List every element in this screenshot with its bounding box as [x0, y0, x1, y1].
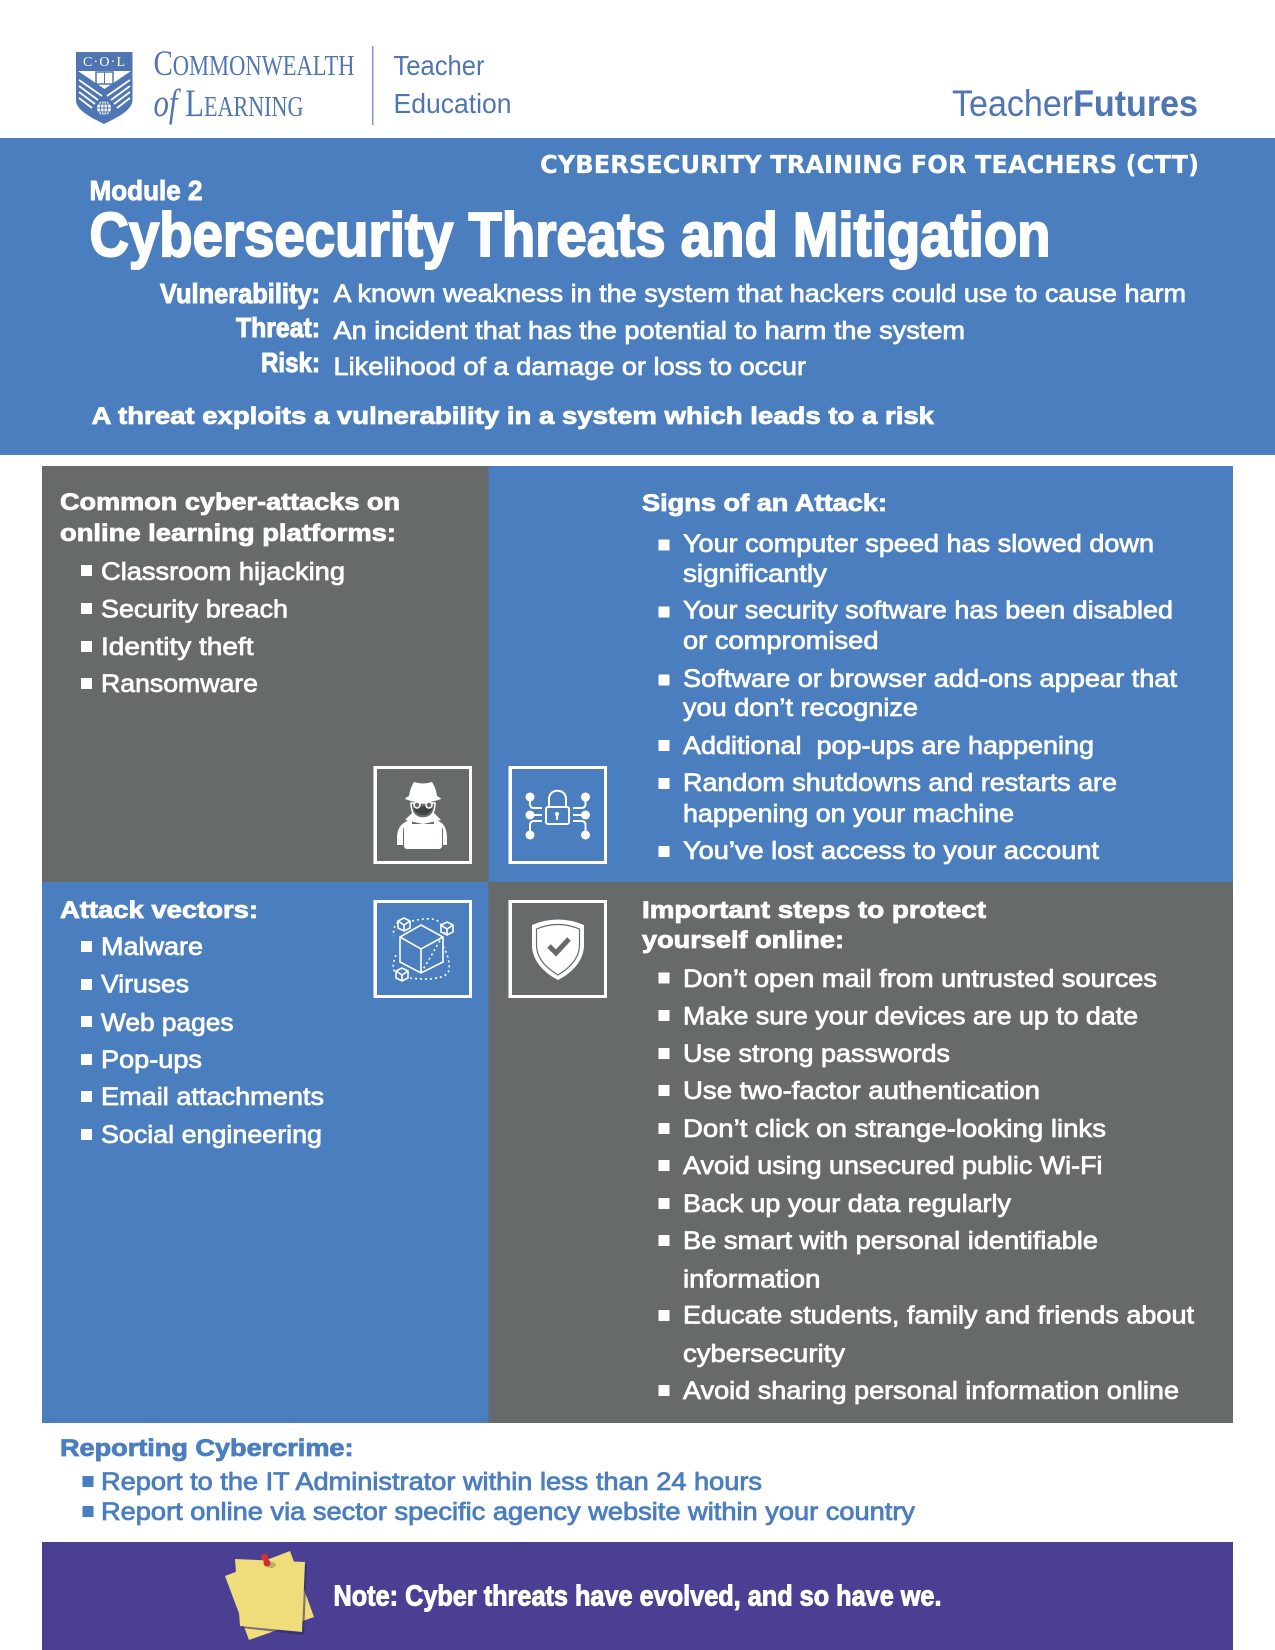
icon: COL shield	[76, 52, 132, 124]
list: Identity theft	[101, 633, 254, 661]
list: Don’t click on strange-looking links	[683, 1115, 1106, 1143]
definitions	[160, 278, 1186, 381]
list: Report to the IT Administrator within less than 24 hours	[101, 1468, 762, 1496]
list	[658, 530, 1177, 865]
icon: shield with check	[508, 900, 606, 998]
icon: sticky notes with pin	[225, 1551, 314, 1640]
icon: hacker	[373, 766, 470, 864]
definitions: A known weakness in the system that hackers could use to cause harm	[334, 280, 1186, 308]
definitions: Likelihood of a damage or loss to occur	[334, 353, 806, 381]
panel: note banner	[42, 1542, 1233, 1650]
list: Viruses	[101, 970, 189, 998]
list: or compromised	[683, 627, 878, 655]
list: Your security software has been disabled	[683, 596, 1173, 624]
heading: Signs of an Attack:	[642, 490, 887, 517]
definitions: Risk:	[261, 347, 320, 378]
programme title: CYBERSECURITY TRAINING FOR TEACHERS (CTT)	[540, 150, 1199, 179]
logo text: Teacher Education	[394, 50, 512, 119]
heading: Common cyber-attacks on	[60, 489, 400, 516]
logo text: Teacher Education: Teacher	[394, 50, 484, 81]
list: cybersecurity	[683, 1340, 846, 1368]
definitions: Vulnerability:	[160, 278, 320, 309]
panel: signs of an attack	[488, 466, 1233, 882]
note text: Note: Cyber threats have evolved, and so have we.	[334, 1580, 942, 1612]
logo text: Teacher Education: Education	[394, 88, 512, 119]
list: information	[683, 1266, 820, 1294]
heading: online learning platforms:	[60, 520, 396, 547]
list: Avoid using unsecured public Wi-Fi	[683, 1152, 1102, 1180]
list: Web pages	[101, 1009, 234, 1037]
list: Malware	[101, 933, 203, 961]
list: Educate students, family and friends about	[683, 1302, 1194, 1330]
panel: title banner	[0, 138, 1275, 455]
list: Make sure your devices are up to date	[683, 1002, 1138, 1030]
list: Use two-factor authentication	[683, 1077, 1040, 1105]
main title: Cybersecurity Threats and Mitigation	[90, 201, 1050, 270]
header: organisation logo	[76, 43, 512, 125]
list: you don’t recognize	[683, 694, 918, 722]
logo wordmark: Commonwealth of Learning: of LEARNING	[154, 82, 304, 125]
panel: common cyber-attacks	[42, 466, 488, 882]
list: Pop-ups	[101, 1046, 202, 1074]
definitions: Threat:	[236, 312, 320, 343]
list	[658, 965, 1194, 1405]
icon: orbiting cube	[373, 900, 470, 998]
icon: COL shield: C·O·L	[83, 55, 125, 70]
list: Social engineering	[101, 1121, 322, 1149]
logo wordmark: Commonwealth of Learning: COMMONWEALTH	[154, 43, 354, 83]
panel: attack vectors	[42, 882, 488, 1423]
list: significantly	[683, 560, 828, 588]
heading: yourself online:	[642, 927, 844, 954]
list: Don’t open mail from untrusted sources	[683, 965, 1157, 993]
list: Software or browser add-ons appear that	[683, 665, 1177, 693]
panel: protective steps	[488, 882, 1233, 1423]
heading: Reporting Cybercrime:	[60, 1435, 354, 1462]
heading: Important steps to protect	[642, 897, 986, 924]
list	[82, 1468, 916, 1526]
list: Be smart with personal identifiable	[683, 1227, 1098, 1255]
list	[81, 558, 345, 698]
icon: network lock	[508, 766, 606, 864]
logo: TeacherFutures: TeacherFutures	[952, 83, 1198, 124]
list: Ransomware	[101, 670, 258, 698]
list: Use strong passwords	[683, 1040, 950, 1068]
list: Additional pop-ups are happening	[683, 732, 1094, 760]
key statement: A threat exploits a vulnerability in a system which leads to a risk	[92, 403, 935, 430]
list: Your computer speed has slowed down	[683, 530, 1154, 558]
reporting cybercrime	[60, 1435, 916, 1526]
list: Security breach	[101, 596, 288, 624]
list: Classroom hijacking	[101, 558, 345, 586]
module label: Module 2	[90, 175, 202, 206]
list: Avoid sharing personal information online	[683, 1377, 1179, 1405]
list	[81, 933, 324, 1149]
list: You’ve lost access to your account	[683, 837, 1099, 865]
logo wordmark: Commonwealth of Learning	[154, 43, 354, 125]
list: Back up your data regularly	[683, 1190, 1012, 1218]
list: Report online via sector specific agency website within your country	[101, 1498, 916, 1526]
definitions: An incident that has the potential to harm the system	[334, 317, 965, 345]
list: Random shutdowns and restarts are	[683, 769, 1117, 797]
heading: Attack vectors:	[60, 897, 258, 924]
list: happening on your machine	[683, 800, 1014, 828]
heading	[60, 489, 400, 547]
list: Email attachments	[101, 1083, 324, 1111]
heading	[642, 897, 986, 954]
